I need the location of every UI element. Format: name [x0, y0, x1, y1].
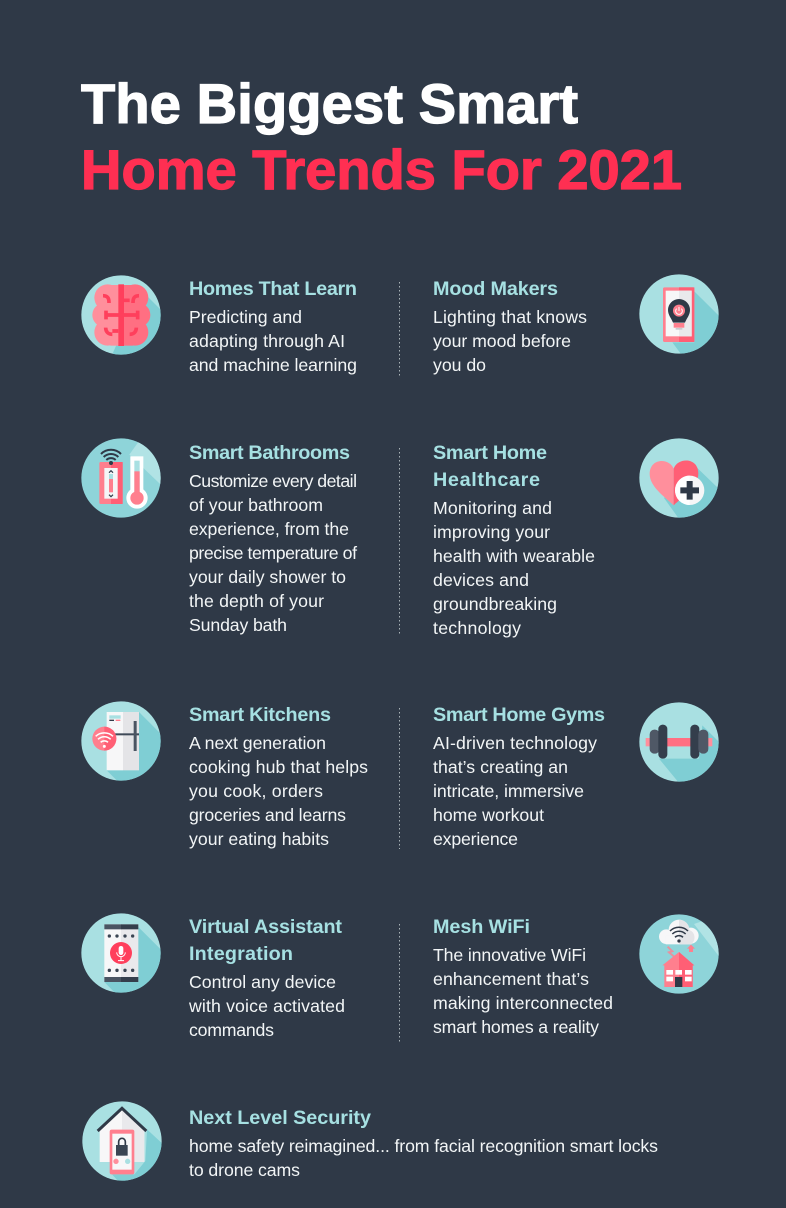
panel: homes that learn: [81, 275, 356, 374]
text block: with voice activated: [188, 996, 345, 1016]
text block: smart homes a reality: [433, 1017, 599, 1037]
heading: Next Level Security: [189, 1107, 371, 1129]
text block: Lighting that knows: [433, 307, 587, 327]
heading: [433, 442, 547, 491]
text block: making interconnected: [433, 993, 613, 1013]
text block: enhancement that’s: [433, 969, 589, 989]
text block: Predicting and: [189, 307, 302, 327]
icon: brain: [81, 275, 161, 355]
text block: [189, 471, 357, 635]
text block: precise temperature of: [189, 543, 357, 563]
text block: you cook, orders: [189, 781, 323, 801]
text block: of your bathroom: [189, 495, 323, 515]
text block: home safety reimagined... from facial recognition smart locks: [189, 1136, 658, 1156]
text block: experience: [433, 829, 518, 849]
text block: you do: [433, 355, 486, 375]
text block: and machine learning: [189, 355, 357, 375]
panel: smart bathrooms: [81, 438, 357, 635]
panel: virtual assistant integration: [81, 913, 345, 1040]
heading: Virtual Assistant: [189, 916, 342, 938]
text block: your daily shower to: [189, 567, 346, 587]
text block: [433, 733, 597, 849]
text block: Sunday bath: [189, 615, 287, 635]
icon: smart home lock: [82, 1101, 162, 1181]
panel: smart kitchens: [81, 701, 368, 849]
icon: heart with plus: [639, 438, 719, 518]
panel: next level security: [82, 1101, 658, 1181]
text block: intricate, immersive: [433, 781, 584, 801]
title: Home Trends For 2021: [81, 138, 682, 201]
icon: smart bulb phone: [639, 274, 719, 354]
text block: [189, 1136, 658, 1180]
text block: [433, 498, 595, 638]
heading: Smart Kitchens: [189, 704, 331, 726]
icon: shower control and thermometer: [81, 438, 164, 518]
heading: Mood Makers: [433, 278, 558, 300]
heading: Smart Bathrooms: [189, 442, 350, 464]
heading: Homes That Learn: [189, 278, 357, 300]
text block: commands: [189, 1020, 274, 1040]
text block: Control any device: [189, 972, 336, 992]
text block: [433, 307, 587, 375]
text block: adapting through AI: [189, 331, 345, 351]
heading: Integration: [189, 943, 293, 965]
title: [81, 72, 682, 201]
text block: technology: [433, 618, 521, 638]
text block: [433, 945, 613, 1037]
panel: smart home healthcare: [433, 438, 719, 638]
heading: Smart Home: [433, 442, 547, 464]
text block: improving your: [433, 522, 550, 542]
panel: mesh wifi: [433, 914, 722, 1037]
heading: [189, 916, 342, 965]
text block: [189, 307, 357, 375]
text block: your mood before: [433, 331, 571, 351]
text block: home workout: [433, 805, 544, 825]
text block: experience, from the: [189, 519, 349, 539]
text block: Monitoring and: [433, 498, 552, 518]
text block: to drone cams: [189, 1160, 300, 1180]
icon: cloud wifi house: [639, 914, 722, 994]
icon: smart fridge: [81, 701, 161, 781]
text block: that’s creating an: [433, 757, 568, 777]
heading: Healthcare: [433, 469, 540, 491]
panel: smart home gyms: [433, 702, 719, 848]
text block: groundbreaking: [433, 594, 557, 614]
text block: AI-driven technology: [433, 733, 597, 753]
text block: devices and: [433, 570, 529, 590]
text block: The innovative WiFi: [433, 945, 586, 965]
heading: Mesh WiFi: [433, 916, 530, 938]
heading: Smart Home Gyms: [433, 704, 605, 726]
text block: [189, 733, 368, 849]
panel: mood makers: [433, 274, 719, 374]
text block: [188, 972, 345, 1040]
text block: health with wearable: [433, 546, 595, 566]
title: The Biggest Smart: [81, 72, 578, 135]
icon: voice assistant speaker: [81, 913, 161, 993]
text block: groceries and learns: [189, 805, 346, 825]
text block: cooking hub that helps: [189, 757, 368, 777]
text block: A next generation: [189, 733, 326, 753]
text block: the depth of your: [189, 591, 324, 611]
text block: your eating habits: [189, 829, 329, 849]
icon: dumbbell: [639, 702, 719, 782]
text block: Customize every detail: [189, 471, 357, 491]
